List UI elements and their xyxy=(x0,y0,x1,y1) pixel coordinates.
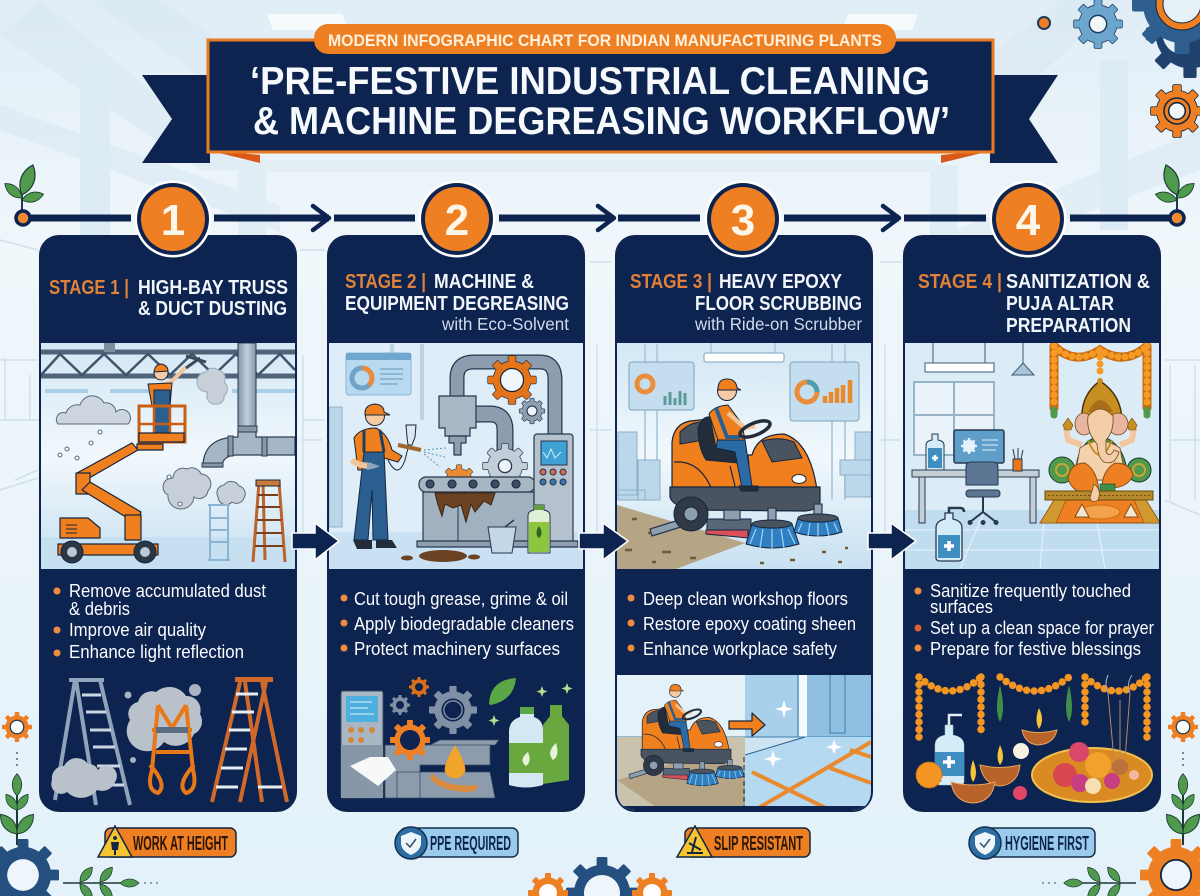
bullets: stage 1: Enhance light reflection xyxy=(69,642,244,662)
ribbon tails xyxy=(142,75,1058,163)
badge: slip resistant: SLIP RESISTANT xyxy=(714,833,803,855)
icons: garlands, sanitizer, diyas and puja thali xyxy=(916,675,1152,803)
heading: stage 3: HEAVY EPOXY xyxy=(719,270,842,293)
worker in basket xyxy=(148,356,206,435)
arrow: stage 2 to 3 xyxy=(579,523,628,560)
bullets: stage 1: & debris xyxy=(69,599,130,619)
ladders xyxy=(208,480,285,562)
decoration: right bottom gears and plants xyxy=(1042,712,1200,896)
illustration: machine degreasing xyxy=(329,343,583,569)
decoration: right sprout xyxy=(1154,163,1197,215)
step number 4 xyxy=(990,180,1066,258)
step number 2: 2 xyxy=(445,196,469,245)
heading: stage 4 xyxy=(918,270,1150,337)
badge: slip resistant xyxy=(677,826,810,857)
bullets: stage 3: Enhance workplace safety xyxy=(643,639,837,659)
title banner xyxy=(142,24,1058,163)
panel: stage 2 xyxy=(327,235,585,812)
bullets: stage 1 xyxy=(54,581,266,662)
bullets: stage 3 xyxy=(628,589,856,659)
arrow: stage 3 to 4 xyxy=(868,523,916,560)
sanitizer bottle xyxy=(936,508,964,561)
timeline line with chevrons xyxy=(16,206,1184,230)
bullets: stage 4: Sanitize frequently touched xyxy=(930,581,1131,601)
badge: ppe required: PPE REQUIRED xyxy=(430,833,511,855)
icons: ladders and safety harness xyxy=(51,677,287,805)
dirty floor xyxy=(617,505,745,569)
step number 3: 3 xyxy=(731,196,755,245)
bullets: stage 1: Improve air quality xyxy=(69,620,206,640)
heading: stage 4: STAGE 4 | xyxy=(918,270,1002,293)
step number 4: 4 xyxy=(1016,196,1041,245)
heading: stage 1: HIGH-BAY TRUSS xyxy=(138,276,288,299)
bullets: stage 2: Apply biodegradable cleaners xyxy=(354,614,574,634)
decoration: left bottom gears and plants xyxy=(0,712,160,896)
arrow: stage 1 to 2 xyxy=(292,523,339,560)
bullets: stage 4: Set up a clean space for prayer xyxy=(930,618,1154,638)
bullets: stage 3: Deep clean workshop floors xyxy=(643,589,848,609)
pipe xyxy=(439,362,555,470)
heading: stage 4: PUJA ALTAR xyxy=(1006,292,1114,315)
badge: hygiene first xyxy=(969,827,1095,859)
bullets: stage 3: Restore epoxy coating sheen xyxy=(643,614,856,634)
heading: stage 3: STAGE 3 | xyxy=(630,270,712,293)
panel: stage 4 xyxy=(903,235,1161,812)
heading: stage 2: MACHINE & xyxy=(434,270,534,293)
heading: stage 4: PREPARATION xyxy=(1006,314,1131,337)
bullets: stage 1: Remove accumulated dust xyxy=(69,581,266,601)
illustration: sanitized workspace and puja altar xyxy=(905,343,1160,569)
marigold garland xyxy=(1054,346,1147,415)
main title xyxy=(250,60,950,143)
badge: hygiene first: HYGIENE FIRST xyxy=(1005,833,1089,855)
bullets: stage 4 xyxy=(914,581,1154,659)
dashboard card xyxy=(346,353,411,395)
gears xyxy=(488,356,536,404)
worker with spray gun xyxy=(352,404,446,549)
bullets: stage 4: surfaces xyxy=(930,597,993,617)
dust clouds xyxy=(56,368,245,509)
bullets: stage 4: Prepare for festive blessings xyxy=(930,639,1141,659)
badge: ppe required xyxy=(395,827,518,859)
illustration: truss dusting with boom lift xyxy=(41,343,295,569)
step number 1: 1 xyxy=(161,196,185,245)
main title: ‘PRE-FESTIVE INDUSTRIAL CLEANING xyxy=(250,60,930,103)
heading: stage 2: EQUIPMENT DEGREASING xyxy=(345,292,569,315)
heading: stage 2 xyxy=(345,270,569,334)
heading: stage 1: STAGE 1 | xyxy=(49,276,129,299)
boom lift xyxy=(58,406,185,563)
ganesha on altar xyxy=(1040,378,1160,523)
decoration: bottom centre gears xyxy=(528,857,672,896)
heading: stage 2: with Eco-Solvent xyxy=(441,314,569,334)
illustration: floor scrubbing xyxy=(617,343,871,569)
step number 3 xyxy=(704,180,782,258)
decoration: left sprout xyxy=(2,163,45,215)
step number 2 xyxy=(418,180,496,258)
heading: stage 3: FLOOR SCRUBBING xyxy=(695,292,862,315)
panel: stage 1 xyxy=(39,235,297,812)
illustration: before and after floor xyxy=(617,675,871,810)
panel: stage 3 xyxy=(615,235,873,812)
decoration: top-right gears xyxy=(1038,0,1200,137)
heading: stage 3 xyxy=(630,270,862,334)
heading: stage 4: SANITIZATION & xyxy=(1006,270,1150,293)
bullets: stage 2: Cut tough grease, grime & oil xyxy=(354,589,568,609)
main title: & MACHINE DEGREASING WORKFLOW’ xyxy=(253,100,950,143)
badge: work at height: WORK AT HEIGHT xyxy=(133,833,228,855)
scrubber machine xyxy=(650,379,842,550)
bucket and bottle xyxy=(401,505,550,562)
small scrubber xyxy=(629,684,744,787)
heading: stage 2: STAGE 2 | xyxy=(345,270,426,293)
bullets: stage 2 xyxy=(340,589,574,659)
heading: stage 1 xyxy=(49,276,288,320)
subtitle pill xyxy=(314,24,896,54)
dashboards xyxy=(629,362,859,421)
ceiling lamps and window xyxy=(914,343,1034,455)
heading: stage 3: with Ride-on Scrubber xyxy=(694,314,862,334)
desk with monitor and chair xyxy=(912,430,1039,525)
subtitle pill: MODERN INFOGRAPHIC CHART FOR INDIAN MANUFACTURING PLANTS xyxy=(328,31,882,50)
machine xyxy=(417,434,578,547)
step number 1 xyxy=(134,180,212,258)
duct xyxy=(202,343,295,467)
heading: stage 1: & DUCT DUSTING xyxy=(138,297,287,320)
truss xyxy=(41,343,295,376)
bullets: stage 2: Protect machinery surfaces xyxy=(354,639,560,659)
icons: machine, gears, oil drop and eco cleaners xyxy=(341,677,572,798)
badge: work at height xyxy=(98,826,236,857)
